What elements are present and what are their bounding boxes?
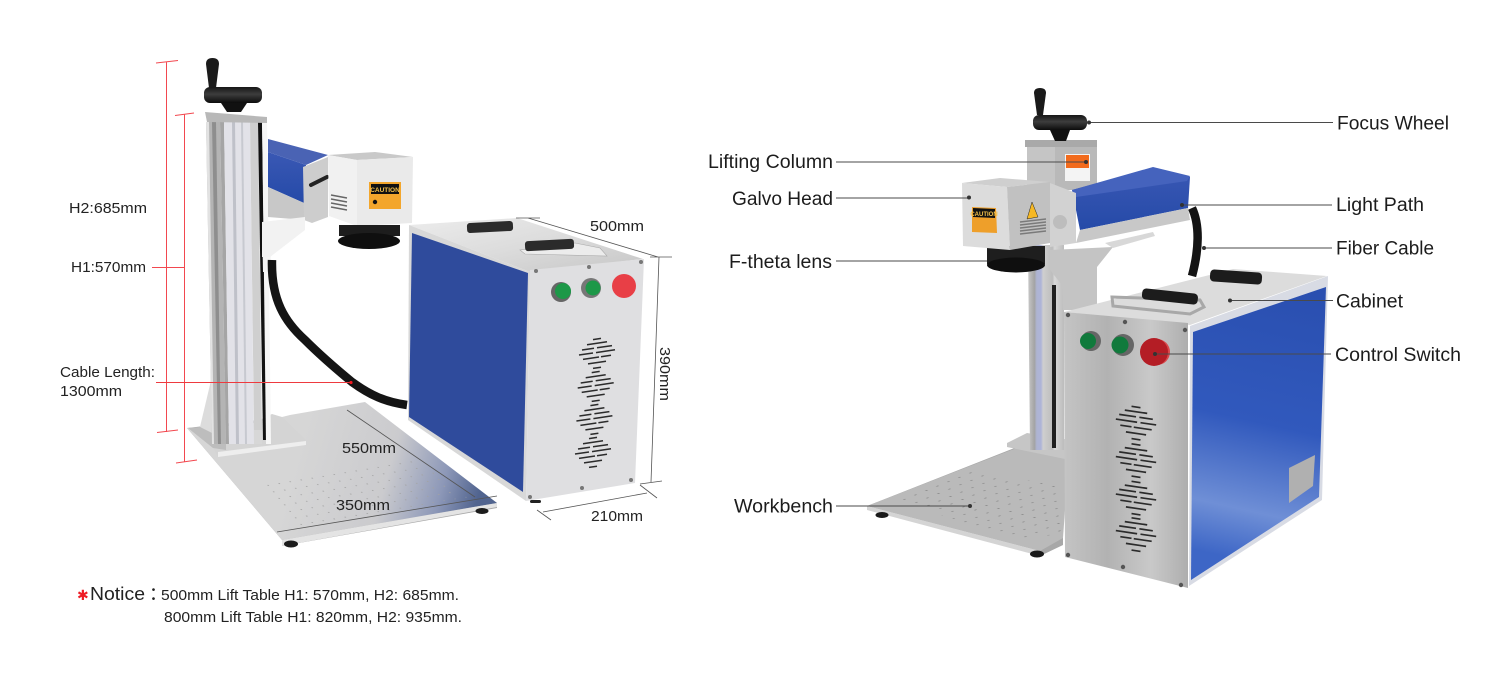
leader lines and dots [836,120,1333,508]
front panel [1064,312,1188,588]
label: cable length: 1300mm [60,383,122,400]
label: 550mm: 550mm [342,440,396,457]
panel: parts machine [867,88,1328,588]
notice: 500mm Lift Table H1: 570mm, H2: 685mm. [161,587,459,604]
notice: ✱ [77,588,89,604]
label: control switch: Control Switch [1335,345,1461,366]
caution label right: CAUTION [970,212,998,218]
notice: 800mm Lift Table H1: 820mm, H2: 935mm. [164,609,462,626]
handles [1112,269,1262,314]
panel: dimensions machine [187,58,644,548]
notice: Notice [90,583,145,604]
screws [1066,313,1187,587]
blue side panel [409,233,528,492]
column foot right [1007,433,1070,460]
notice: ： [149,584,167,604]
label: cable length [60,364,155,400]
front panel [526,259,644,501]
label: focus wheel: Focus Wheel [1337,114,1449,134]
label: lifting column: Lifting Column [708,152,833,173]
label: 350mm: 350mm [336,497,390,514]
warning triangle [1027,202,1038,219]
cabinet left [408,218,644,503]
vents [1116,406,1156,551]
label: H1: H1:570mm [71,259,146,276]
cable end marker [349,381,353,384]
base foot and gusset [188,372,306,457]
label: 390mm: 390mm [656,347,673,401]
grey dimension lines [516,218,672,520]
arm and light path right [1050,167,1190,247]
label: 210mm: 210mm [591,508,643,525]
F-theta lens right [987,246,1045,272]
label: fiber cable: Fiber Cable [1336,238,1434,260]
label: H2: H2:685mm [69,200,147,217]
arm and light path left [262,139,328,257]
label: light path: Light Path [1336,195,1424,216]
lifting column right [1025,140,1155,450]
galvo head left [328,152,413,249]
screws [528,260,643,499]
rating plate [1289,455,1315,503]
focus wheel left [204,58,262,112]
control buttons [551,274,636,302]
notice [77,583,462,626]
label: 500mm: 500mm [590,218,644,235]
workbench right [867,440,1070,558]
control buttons [1080,331,1170,366]
galvo head right [962,178,1050,250]
fiber cable left [272,260,407,405]
fiber cable right [1192,208,1198,276]
label: galvo head: Galvo Head [732,189,833,210]
blue side panel [1191,287,1326,580]
focus wheel right [1033,88,1087,141]
label: cabinet: Cabinet [1336,292,1404,312]
caution label left: CAUTION [370,187,400,194]
warning labels [1065,154,1090,181]
label: F-theta lens: F-theta lens [729,252,832,273]
label: workbench: Workbench [734,496,833,518]
label: cable length: Cable Length: [60,364,155,381]
cabinet right [1064,269,1328,588]
workbench left [187,402,497,548]
vents [575,338,615,467]
red dimension lines [152,60,351,463]
lifting column left [205,112,271,444]
handles [467,221,607,256]
